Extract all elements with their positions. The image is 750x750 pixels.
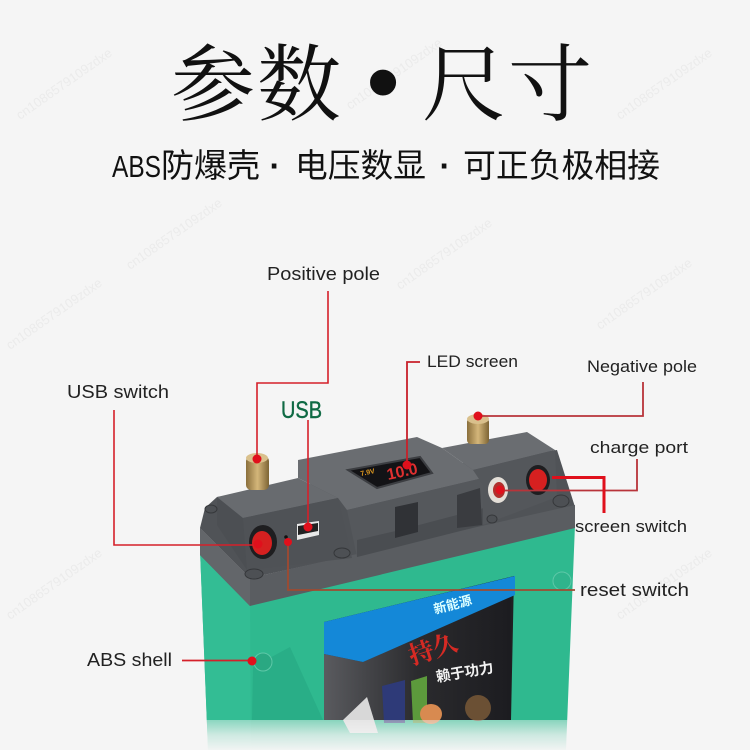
subtitle: 防爆壳 [161,147,260,184]
brass negative terminal [467,414,489,444]
subtitle [112,147,660,184]
USB switch button [249,525,277,559]
product label: 赖于功力 [435,658,495,686]
title: 参 [171,18,255,139]
callout: charge port: charge port [590,438,688,457]
grey housing centre block [298,437,483,510]
charge port [488,477,508,503]
callout: LED screen [402,352,518,470]
callout: ABS shell [87,650,256,670]
callout: Negative pole [474,357,697,420]
infographic canvas: cn1086579109zdxe [3,545,105,622]
grey housing right block [442,432,555,470]
callout: USB switch: USB switch [67,382,169,402]
ABS shell rivet [254,653,272,671]
title: 寸 [508,18,592,139]
infographic canvas: cn1086579109zdxe [123,195,225,272]
infographic canvas: cn1086579109zdxe [593,255,695,332]
callout: LED screen: LED screen [427,352,518,371]
callout: USB switch [67,382,262,548]
bottom fade [190,720,590,750]
callout: Positive pole: Positive pole [267,264,380,284]
infographic canvas: cn1086579109zdxe [613,45,715,122]
infographic canvas: cn1086579109zdxe [393,215,495,292]
callout: reset switch: reset switch [580,580,689,600]
brass positive terminal [246,453,269,490]
infographic canvas: cn1086579109zdxe [3,275,105,352]
subtitle: 电压数显 [295,147,426,184]
product label: 持久 [403,623,462,673]
product label [324,576,515,733]
subtitle: · [270,147,280,184]
grey housing rim [200,450,575,578]
infographic canvas: cn1086579109zdxe [13,45,115,122]
screen switch button [526,465,550,495]
LED screen: 7.9V [360,468,376,478]
infographic canvas: cn1086579109zdxe [613,545,715,622]
callout: USB: USB [281,397,322,424]
callout: ABS shell: ABS shell [87,650,172,670]
product label: 新能源 [432,592,473,617]
title [171,18,592,139]
subtitle: 可正负极相接 [463,147,660,184]
green battery body [200,525,575,750]
callout: Positive pole [252,264,380,464]
corner screws [205,495,569,579]
infographic canvas: cn1086579109zdxe [343,35,445,112]
title: • [366,28,400,135]
subtitle: ABS [112,149,161,184]
battery illustration [190,414,590,750]
callout: charge port [496,438,688,494]
handle recesses [347,478,484,557]
subtitle: · [440,147,450,184]
USB port [297,521,319,540]
LED screen [348,457,432,488]
reset hole [284,535,288,539]
LED screen: 10.0 [385,461,419,484]
title: 数 [257,18,341,139]
grey housing left block [217,497,247,570]
title: 尺 [422,18,506,139]
callout: USB [281,397,322,532]
callout: reset switch [284,538,689,600]
callout: screen switch [552,478,687,536]
callout: Negative pole: Negative pole [587,357,697,376]
callout: screen switch: screen switch [575,517,687,536]
